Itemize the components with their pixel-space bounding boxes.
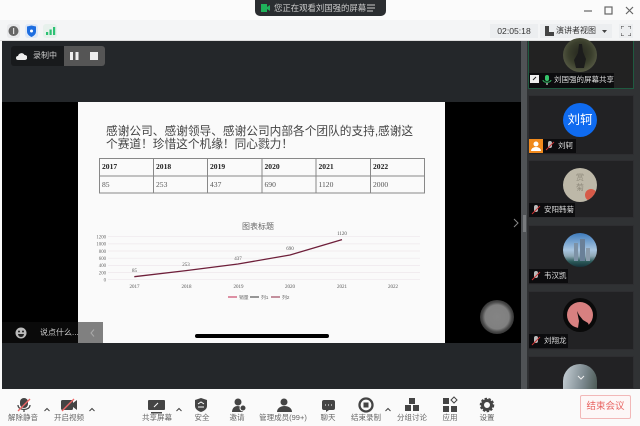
line chart: 2020 [285,285,296,290]
participant tile: bottom [528,356,634,389]
fullscreen button [619,24,633,38]
line chart: 2021 [337,285,348,290]
participant tile: 刘翔龙 [528,291,634,350]
line chart: 85 [132,269,138,274]
avatar: 刘国强 [563,38,597,72]
line chart: 1120 [337,232,347,237]
chat collapse button [78,322,103,343]
data table: 85 [102,180,110,189]
slide heading [106,124,413,151]
line chart: 2019 [234,285,244,290]
avatar: bottom [563,364,597,389]
label: 解除静音: 解除静音 [8,413,38,422]
sidebar background [527,41,640,389]
participant tile: 韦汉凯 [528,225,634,285]
screen-share notice banner: 您正在观看刘国强的屏幕 [274,3,366,13]
avatar: 韦汉凯 [563,233,597,267]
chat input hint [2,322,78,343]
data table: 2020 [264,162,280,171]
sidebar left rail [521,41,527,389]
slide heading: 个赛道！珍惜这个机缘！同心戮力！ [106,138,293,151]
label: 管理成员: 管理成员(99+) [259,413,307,422]
data table: 2019 [210,162,225,171]
line chart: 2017 [130,285,140,290]
bottom toolbar [0,389,640,426]
end meeting button [580,395,631,419]
participant tile: 刘国强 [528,41,634,89]
slide home indicator bar [195,334,329,338]
name tag: 刘国强 [529,73,614,88]
participant tile: 安阳韩菊 [528,160,634,218]
data table: 437 [210,180,222,189]
end meeting button: 结束会议 [586,401,624,412]
text: 刘轲 [558,141,573,150]
line chart: 列2 [282,294,290,301]
meeting timer: 02:05:18 [497,26,531,36]
toolbar strip [0,20,640,41]
name tag: 刘翔龙: 刘翔龙 [544,336,566,345]
name tag: 韦汉凯 [529,269,568,283]
name tag: 韦汉凯: 韦汉凯 [544,271,566,280]
line chart: 列1 [261,294,269,301]
line chart: 200 [99,271,107,276]
toolbar icons [17,396,494,414]
line chart: 2018 [182,285,192,290]
label: 设置: 设置 [480,413,494,422]
avatar: 刘翔龙 [563,298,597,332]
avatar: 安阳韩菊 [563,168,597,202]
participant tile: 刘轲 [528,95,634,155]
data table: 2000 [373,180,388,189]
name tag: 刘国强: 刘国强的屏幕共享 [554,75,614,84]
label: 邀请: 邀请 [230,413,244,422]
label: 聊天: 聊天 [320,413,336,422]
speaker view button: 演讲者视图 [556,26,596,35]
name tag: 安阳韩菊 [529,203,575,217]
next page arrow [514,218,519,228]
data table: 2022 [373,162,388,171]
line chart: 2022 [388,285,398,290]
data table: 2017 [102,162,117,171]
slide heading: 感谢公司、感谢领导、感谢公司内部各个团队的支持,感谢这 [106,124,413,138]
avatar: 安阳韩菊: 赏 [576,173,584,182]
data table: 253 [156,180,168,189]
dark meeting background [2,41,522,389]
shared screen black area [2,102,521,343]
data table [99,158,425,194]
name tag: 安阳韩菊: 安阳韩菊 [544,205,574,214]
line chart [96,221,420,301]
line chart: 1200 [96,236,107,240]
line chart: 销量 [239,294,249,301]
avatar: 安阳韩菊: 菊 [576,183,584,192]
line chart: 253 [182,263,190,268]
label: 应用: 应用 [442,413,458,422]
data table: 1120 [318,180,334,189]
label: 开启视频: 开启视频 [54,413,84,422]
name tag: 刘翔龙 [529,334,568,348]
label: 安全: 安全 [194,413,210,422]
status icons [7,24,57,38]
sidebar scrollbar [523,215,526,232]
avatar: 刘轲: 刘轲 [567,113,592,127]
data table: 690 [264,180,276,189]
line chart: 690 [286,247,294,252]
label: 共享屏幕: 共享屏幕 [142,413,172,422]
speaker view button [540,24,612,38]
scroll-down arrow [578,376,584,380]
data table: 2021 [318,162,334,171]
screen-share notice banner [255,0,386,16]
line chart: 600 [99,257,107,262]
chat input hint: 说点什么... [40,328,79,337]
presentation slide [78,102,445,343]
label: 分组讨论: 分组讨论 [397,413,427,422]
recording indicator: 录制中 [33,51,57,60]
name tag: 刘轲 [529,139,555,153]
meeting timer [490,24,538,38]
recording indicator [11,46,105,66]
line chart: 800 [99,250,107,255]
line chart: 400 [99,264,107,269]
line chart: 1000 [96,243,107,248]
line chart: 图表标题 [242,221,274,231]
floating assistive button [480,300,514,334]
line chart: 0 [104,278,107,284]
line chart: 437 [234,257,242,262]
top title bar [0,0,640,20]
data table: 2018 [156,162,171,171]
label: 结束录制: 结束录制 [351,413,381,422]
avatar: 刘轲 [563,103,597,137]
window controls [584,6,634,15]
